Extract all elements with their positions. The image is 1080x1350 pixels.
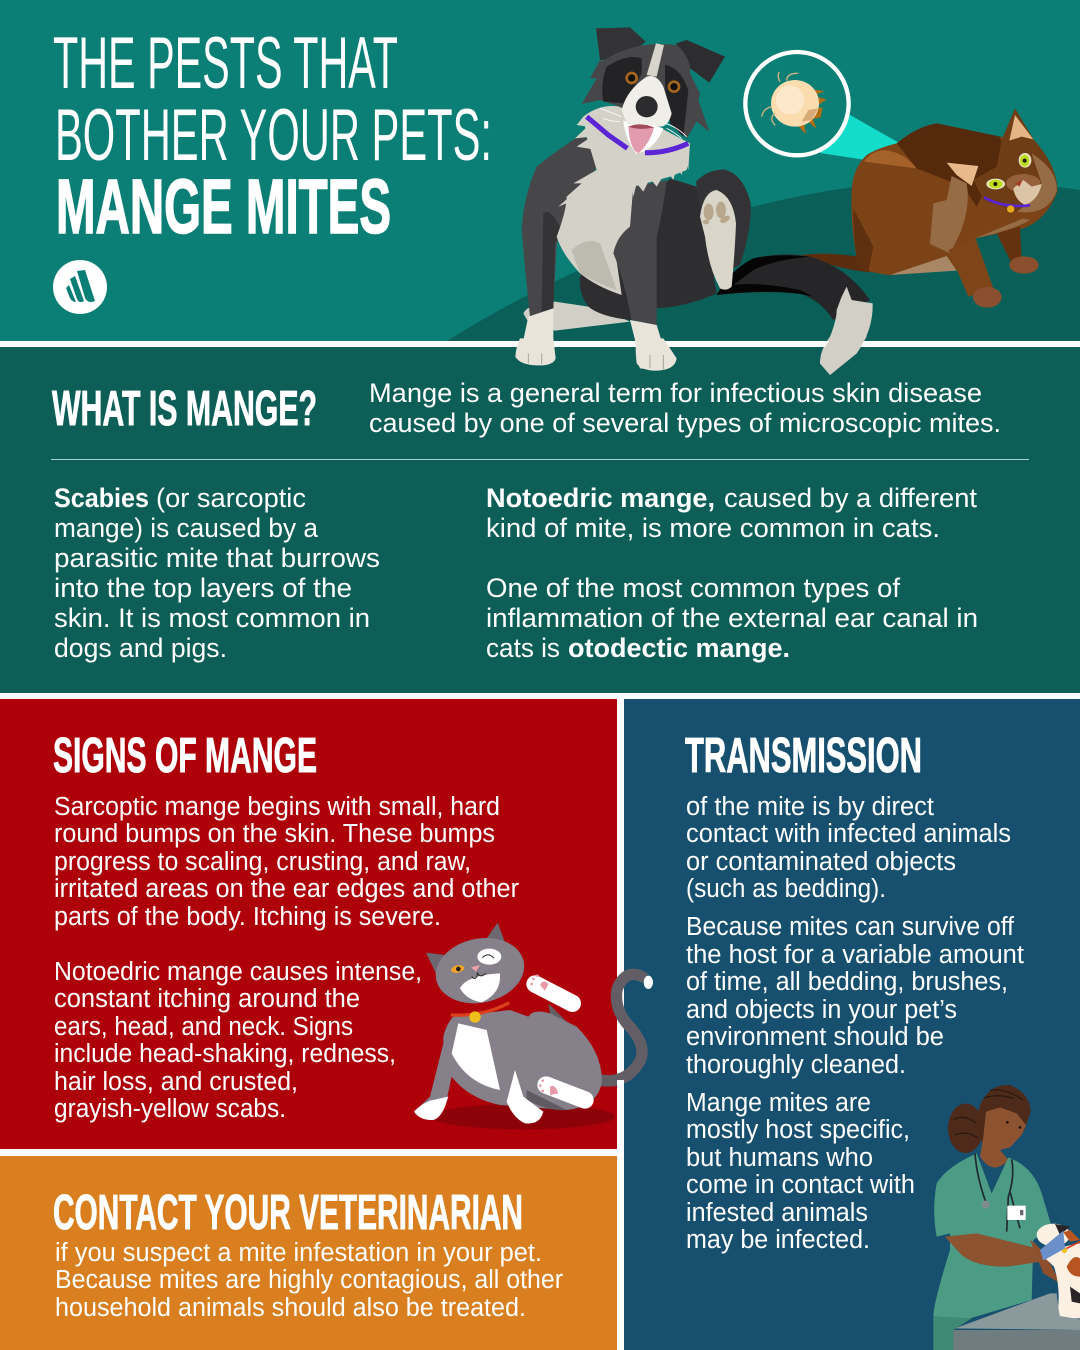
- cat body: [414, 974, 602, 1124]
- transmission text: cleaning: environment should be: [686, 1023, 944, 1051]
- notoedric and otodectic text: One of the most common types of: [486, 573, 901, 603]
- transmission text: humans: may be infected.: [686, 1226, 870, 1254]
- scabies text: dogs and pigs.: [54, 633, 227, 663]
- mange definition: caused by one of several types of microscopic mites.: [369, 408, 1001, 438]
- cat head: [426, 923, 530, 1011]
- notoedric and otodectic text: cats is: [486, 633, 560, 663]
- transmission text: cleaning: [686, 913, 1024, 1079]
- signs text: sarcoptic: Sarcoptic mange begins with small, hard: [54, 793, 500, 821]
- contact text: [55, 1239, 563, 1322]
- signs text: notoedric: Notoedric mange causes intense,: [54, 958, 422, 986]
- signs text: sarcoptic: [54, 793, 519, 931]
- signs text: sarcoptic: parts of the body. Itching is severe.: [54, 903, 441, 931]
- signs text: notoedric: constant itching around the: [54, 985, 360, 1013]
- white divider between panels: [617, 910, 624, 1150]
- signs text: notoedric: hair loss, and crusted,: [54, 1068, 298, 1096]
- illustration: border collie: [517, 27, 873, 375]
- title: MANGE MITES: [56, 164, 391, 250]
- notoedric and otodectic text: Notoedric mange,: [486, 483, 715, 513]
- notoedric and otodectic text: otodectic mange.: [568, 633, 790, 663]
- panel: signs background: [0, 699, 617, 1149]
- transmission text: humans: but humans who: [686, 1144, 873, 1172]
- scabies text: mange) is caused by a: [54, 513, 319, 543]
- transmission text: contact: [686, 793, 1011, 903]
- signs text: notoedric: ears, head, and neck. Signs: [54, 1013, 353, 1041]
- dog collar: [587, 117, 688, 153]
- scabies text: (or sarcoptic: [156, 483, 306, 513]
- transmission text: cleaning: the host for a variable amount: [686, 941, 1024, 969]
- contact text: if you suspect a mite infestation in your pet.: [55, 1239, 542, 1267]
- transmission text: humans: Mange mites are: [686, 1089, 871, 1117]
- panel: contact background: [0, 1156, 617, 1350]
- illustration: gray cat scratching: [414, 910, 653, 1150]
- transmission text: humans: come in contact with: [686, 1171, 915, 1199]
- notoedric and otodectic text: [486, 483, 978, 663]
- signs text: sarcoptic: progress to scaling, crusting, and raw,: [54, 848, 471, 876]
- transmission text: humans: mostly host specific,: [686, 1116, 910, 1144]
- what is mange heading: WHAT IS MANGE?: [52, 382, 317, 436]
- panel: what is mange background: [0, 347, 1080, 693]
- illustration: brown cat: [802, 108, 1057, 308]
- cat tail: [600, 974, 653, 1081]
- dog raised leg: [696, 169, 751, 290]
- dog head: [582, 27, 725, 154]
- contact text: household animals should also be treated.: [55, 1294, 526, 1322]
- scabies text: skin. It is most common in: [54, 603, 370, 633]
- panel: header background: [0, 0, 1080, 341]
- notoedric and otodectic text: kind of mite, is more common in cats.: [486, 513, 940, 543]
- dog paws and tail tip over the divider: [515, 337, 867, 375]
- title: BOTHER YOUR PETS:: [55, 95, 492, 176]
- panel: transmission background: [624, 699, 1080, 1350]
- transmission heading: TRANSMISSION: [685, 729, 922, 783]
- transmission text: contact: contact with infected animals: [686, 820, 1011, 848]
- signs text: sarcoptic: round bumps on the skin. These bumps: [54, 820, 495, 848]
- mange definition: Mange is a general term for infectious skin disease: [369, 378, 982, 408]
- scabies text: [54, 483, 380, 663]
- cat collar: [451, 1003, 509, 1023]
- scabies text: Scabies: [54, 483, 149, 513]
- transmission text: cleaning: of time, all bedding, brushes,: [686, 968, 1008, 996]
- transmission text: humans: [686, 1089, 915, 1254]
- icon: mite zoom beam: [820, 115, 952, 173]
- signs text: notoedric: include head-shaking, redness,: [54, 1040, 396, 1068]
- white dividers: [0, 341, 1080, 1350]
- notoedric and otodectic text: caused by a different: [724, 483, 978, 513]
- scabies text: parasitic mite that burrows: [54, 543, 380, 573]
- signs text: notoedric: grayish-yellow scabs.: [54, 1095, 286, 1123]
- dog torso and legs: [517, 106, 690, 369]
- signs of mange heading: SIGNS OF MANGE: [53, 729, 317, 783]
- contact heading: CONTACT YOUR VETERINARIAN: [53, 1186, 523, 1240]
- illustration: veterinarian with cat: [933, 1085, 1080, 1350]
- scabies text: into the top layers of the: [54, 573, 352, 603]
- transmission text: contact: (such as bedding).: [686, 875, 886, 903]
- transmission text: contact: or contaminated objects: [686, 848, 956, 876]
- notoedric and otodectic text: inflammation of the external ear canal in: [486, 603, 978, 633]
- transmission text: contact: of the mite is by direct: [686, 793, 934, 821]
- dog tail: [717, 255, 873, 375]
- transmission text: cleaning: and objects in your pet’s: [686, 996, 957, 1024]
- dog body: [580, 178, 717, 320]
- icon: mite in magnifier: [745, 52, 849, 155]
- icon: logo: [53, 260, 107, 314]
- signs text: notoedric: [54, 958, 422, 1123]
- signs text: sarcoptic: irritated areas on the ear edges and other: [54, 875, 519, 903]
- transmission text: humans: infested animals: [686, 1199, 868, 1227]
- mange definition: [369, 378, 1001, 438]
- transmission text: cleaning: Because mites can survive off: [686, 913, 1015, 941]
- title: THE PESTS THAT: [53, 23, 398, 104]
- title: [53, 23, 492, 250]
- dog hind leg: [523, 302, 630, 331]
- transmission text: cleaning: thoroughly cleaned.: [686, 1051, 906, 1079]
- contact text: Because mites are highly contagious, all other: [55, 1266, 563, 1294]
